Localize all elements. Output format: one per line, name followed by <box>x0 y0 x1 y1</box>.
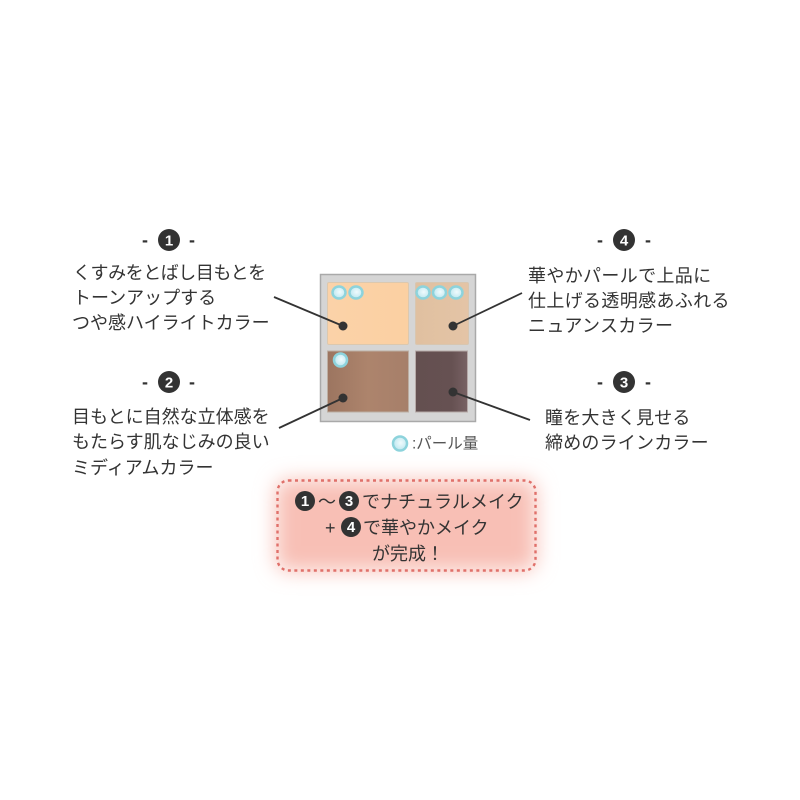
badge 2: 2 <box>165 374 173 392</box>
badge 4: - <box>645 230 651 250</box>
shade 3: line color <box>416 351 468 412</box>
text block 2: 目もとに自然な立体感を <box>72 407 270 427</box>
badge 3: 3 <box>620 374 628 392</box>
badge 2 <box>142 371 195 393</box>
badge 1 <box>142 229 195 251</box>
leader line 2 <box>279 394 348 428</box>
callout line 1: 1 <box>301 493 309 510</box>
pearl markers on shade 4 <box>416 286 462 298</box>
badge 3 <box>597 371 651 393</box>
shade 4: nuance color <box>416 282 468 344</box>
badge 1: 1 <box>165 232 173 250</box>
text block 1: くすみをとばし目もとを <box>73 263 266 283</box>
badge 3: - <box>597 372 603 392</box>
badge 2: - <box>189 372 195 392</box>
leader line 3 <box>448 388 530 420</box>
text block 3 line 2: 締めのラインカラー <box>545 433 709 453</box>
callout line 1 <box>295 491 524 512</box>
callout line 1: 3 <box>345 493 353 510</box>
badge 4: - <box>597 230 603 250</box>
text block 2 line 2: もたらす肌なじみの良い <box>72 432 270 452</box>
badge 3: - <box>645 372 651 392</box>
callout line 2: 4 <box>347 519 356 536</box>
leader line 1 <box>274 297 348 330</box>
callout line 2: + <box>325 518 336 538</box>
badge 1: - <box>142 230 148 250</box>
text block 1 line 3: つや感ハイライトカラー <box>72 313 270 333</box>
palette <box>320 274 476 422</box>
legend: pearl amount: :パール量 <box>412 436 478 452</box>
callout line 1: ～ <box>318 492 336 512</box>
text block 3: 瞳を大きく見せる <box>545 408 691 428</box>
callout <box>276 480 536 571</box>
text block 4: 華やかパールで上品に <box>528 266 712 286</box>
leader line 4 <box>448 293 522 330</box>
pearl markers on shade 1 <box>332 286 362 298</box>
callout line 3: が完成！ <box>372 544 444 564</box>
badge 1: - <box>189 230 195 250</box>
badge 2: - <box>142 372 148 392</box>
pearl marker on shade 2 <box>334 354 347 366</box>
text block 4 line 3: ニュアンスカラー <box>528 316 673 336</box>
text block 4 line 2: 仕上げる透明感あふれる <box>528 291 730 311</box>
badge 4 <box>597 229 651 251</box>
text block 1 line 2: トーンアップする <box>73 288 216 308</box>
callout line 2: で華やかメイク <box>363 518 489 538</box>
shade 2: medium color <box>328 351 408 412</box>
callout line 1: でナチュラルメイク <box>362 492 524 512</box>
badge 4: 4 <box>620 232 629 250</box>
text block 2 line 3: ミディアムカラー <box>72 458 213 478</box>
shade 1: highlight color <box>328 282 408 344</box>
